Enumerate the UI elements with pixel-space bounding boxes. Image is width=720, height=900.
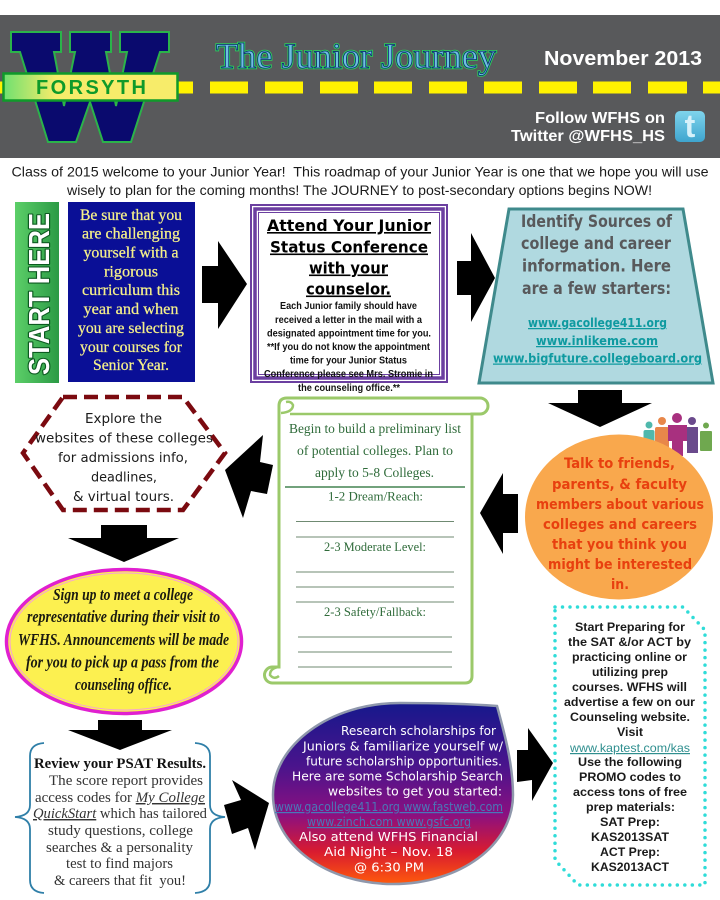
panel: talk to friends: colleges and careers	[543, 517, 697, 533]
panel: PSAT results with braces: access codes for My College	[35, 790, 206, 806]
header banner	[0, 15, 720, 158]
panel: PSAT results with braces: Review your PSAT Results.	[34, 756, 206, 772]
panel: challenging curriculum: Senior Year.	[93, 357, 169, 374]
panel: junior status conference: the counseling office.**	[298, 383, 400, 394]
arrow: left	[480, 473, 518, 554]
panel: explore websites hexagon: Explore the	[85, 412, 162, 427]
panel: challenging curriculum: rigorous	[104, 264, 158, 280]
panel: college representative ellipse: Sign up to meet a college	[53, 585, 193, 604]
panel: challenging curriculum: you are selecting	[78, 320, 184, 337]
intro text: wisely to plan for the coming months! The JOURNEY to post-secondary options begins NOW!	[66, 182, 652, 198]
arrow: tilted right	[224, 780, 269, 850]
panel: scholarships blob: @ 6:30 PM	[354, 860, 424, 874]
panel: scholarships blob: websites to get you started:	[328, 784, 502, 798]
panel: SAT ACT prep dotted box: PROMO codes to	[579, 770, 681, 784]
panel: explore websites hexagon: for admissions info,	[58, 451, 188, 466]
panel: junior status conference: Conference please see Mrs. Stromie in	[264, 369, 433, 380]
panel: challenging curriculum: Be sure that you	[80, 207, 182, 224]
panel: talk to friends: members about various	[536, 497, 704, 513]
panel: scholarships blob: Aid Night – Nov. 18	[324, 845, 453, 859]
panel: sources of information: www.inlikeme.com	[536, 333, 658, 348]
panel: scholarships blob: www.zinch.com www.gsfc.org	[307, 815, 471, 829]
panel: scholarships blob: Also attend WFHS Financial	[299, 830, 478, 844]
panel: sources of information: www.bigfuture.collegeboard.org	[493, 350, 702, 366]
panel: challenging curriculum: curriculum this	[82, 282, 180, 299]
panel: challenging curriculum: your courses for	[80, 339, 183, 356]
arrow: down 1	[548, 390, 652, 427]
panel: PSAT results with braces: study questions, college	[48, 823, 193, 839]
panel: scholarships blob: Research scholarships for	[341, 724, 496, 738]
panel: scholarships blob: Here are some Scholarship Search	[292, 770, 503, 784]
arrow: right 2	[457, 233, 495, 322]
panel: SAT ACT prep dotted box: Use the following	[578, 755, 682, 769]
panel: college list scroll: Begin to build a preliminary list	[289, 422, 461, 437]
panel: college representative ellipse: representative during their visit to	[27, 607, 220, 626]
panel: PSAT results with braces: searches & a personality	[46, 840, 194, 856]
panel: junior status conference: Attend Your Junior	[267, 216, 431, 235]
panel: sources of information: college and career	[521, 234, 672, 253]
panel: college representative ellipse: for you to pick up a pass from the	[26, 652, 219, 672]
panel: talk to friends: parents, & faculty	[552, 477, 687, 493]
panel: SAT ACT prep dotted box: KAS2013SAT	[591, 830, 670, 844]
panel: scholarships blob	[273, 703, 513, 884]
twitter follow text: Twitter @WFHS_HS	[511, 128, 665, 145]
panel: college list scroll	[264, 398, 488, 683]
panel: talk to friends: Talk to friends,	[564, 456, 675, 472]
panel: junior status conference: with your	[309, 258, 388, 278]
arrow: right to prep box	[517, 728, 553, 801]
panel: talk to friends: might be interested	[548, 557, 692, 573]
panel: college list scroll: of potential colleges. Plan to	[297, 444, 453, 459]
panel: college list scroll: 1-2 Dream/Reach:	[328, 488, 423, 504]
panel: SAT ACT prep dotted box: access tons of free	[573, 785, 687, 799]
panel: sources of information: www.gacollege411.org	[528, 315, 667, 330]
arrow: tilted left	[225, 435, 273, 518]
panel: SAT ACT prep dotted box: SAT Prep:	[600, 815, 660, 829]
panel: college representative ellipse	[6, 570, 242, 714]
panel: sources of information: are a few starters:	[522, 279, 671, 298]
panel: junior status conference: **If you do not know the appointment	[267, 342, 431, 353]
panel: challenging curriculum: yourself with a	[84, 244, 178, 262]
panel: talk to friends	[525, 413, 713, 600]
panel: PSAT results with braces: The score report provides	[49, 773, 203, 789]
panel: college representative ellipse: counseling office.	[75, 675, 172, 694]
start here tab: START HERE	[24, 213, 56, 375]
panel: SAT ACT prep dotted box: utilizing prep	[592, 665, 668, 679]
panel: college representative ellipse: WFHS. Announcements will be made	[18, 630, 229, 649]
panel: SAT ACT prep dotted box: courses. WFHS will	[572, 680, 687, 694]
panel: SAT ACT prep dotted box: prep materials:	[586, 800, 675, 814]
panel: PSAT results with braces: & careers that fit you!	[54, 873, 186, 889]
panel: sources of information: Identify Sources of	[521, 212, 673, 231]
panel: SAT ACT prep dotted box: advertise a few on our	[564, 695, 695, 709]
panel: sources of information: information. Here	[522, 256, 671, 276]
title: The Junior Journey	[216, 36, 496, 76]
panel: explore websites hexagon: deadlines,	[91, 470, 157, 486]
title: The Junior Journey	[216, 36, 496, 76]
twitter follow text: Follow WFHS on	[535, 110, 665, 127]
panel: talk to friends: that you think you	[552, 537, 687, 553]
panel: scholarships blob: www.gacollege411.org www.fastweb.com	[275, 800, 503, 814]
panel: challenging curriculum	[68, 202, 195, 382]
panel: talk to friends: in.	[611, 577, 629, 593]
panel: SAT ACT prep dotted box: Start Preparing for	[575, 620, 685, 634]
panel: junior status conference: received a letter in the mail with a	[275, 315, 422, 326]
intro text: Class of 2015 welcome to your Junior Year! This roadmap of your Junior Year is one that we hope you will use	[12, 164, 709, 180]
panel: SAT ACT prep dotted box	[555, 607, 705, 885]
panel: explore websites hexagon: & virtual tours.	[73, 490, 174, 505]
icon: twitter	[675, 108, 705, 144]
start here tab	[15, 202, 59, 383]
panel: explore websites hexagon: websites of these colleges	[35, 432, 213, 446]
panel: SAT ACT prep dotted box: Visit	[617, 725, 643, 739]
panel: scholarships blob: Juniors & familiarize yourself w/	[302, 740, 504, 754]
panel: junior status conference	[251, 205, 447, 394]
panel: PSAT results with braces: test to find majors	[66, 856, 173, 872]
panel: SAT ACT prep dotted box: KAS2013ACT	[591, 860, 670, 874]
panel: sources of information	[479, 209, 713, 383]
panel: SAT ACT prep dotted box: the SAT &/or ACT by	[568, 635, 691, 649]
panel: explore websites hexagon	[23, 397, 225, 510]
panel: scholarships blob: future scholarship opportunities.	[306, 754, 502, 768]
panel: junior status conference: designated appointment time for you.	[267, 328, 431, 340]
date: November 2013	[544, 48, 702, 70]
panel: SAT ACT prep dotted box: practicing online or	[572, 650, 687, 664]
panel: PSAT results with braces: QuickStart which has tailored	[33, 806, 208, 822]
panel: junior status conference: time for your Junior Status	[290, 356, 407, 366]
panel: college list scroll: 2-3 Safety/Fallback:	[324, 604, 426, 619]
panel: SAT ACT prep dotted box: www.kaptest.com/kas	[569, 741, 690, 755]
logo: Forsyth W	[4, 32, 178, 142]
panel: college list scroll: 2-3 Moderate Level:	[324, 539, 426, 554]
arrow: down 2	[68, 525, 179, 562]
panel: challenging curriculum: year and when	[84, 301, 178, 318]
panel: junior status conference: counselor.	[306, 280, 391, 298]
panel: college list scroll: apply to 5-8 Colleges.	[315, 466, 434, 481]
twitter follow text	[511, 110, 665, 145]
logo: Forsyth W: FORSYTH	[36, 77, 146, 99]
panel: junior status conference: Status Conference	[270, 238, 428, 256]
arrow: down 3	[68, 720, 172, 750]
icon: twitter: t	[685, 108, 696, 144]
road dashes	[0, 82, 720, 94]
panel: junior status conference: Each Junior family should have	[280, 301, 417, 312]
panel: PSAT results with braces	[15, 743, 225, 893]
icon: people	[644, 413, 712, 456]
panel: SAT ACT prep dotted box: ACT Prep:	[600, 845, 660, 859]
intro text	[12, 164, 709, 198]
arrow: right 1	[202, 241, 247, 329]
panel: challenging curriculum: are challenging	[82, 226, 180, 242]
panel: SAT ACT prep dotted box: Counseling website.	[570, 710, 690, 724]
